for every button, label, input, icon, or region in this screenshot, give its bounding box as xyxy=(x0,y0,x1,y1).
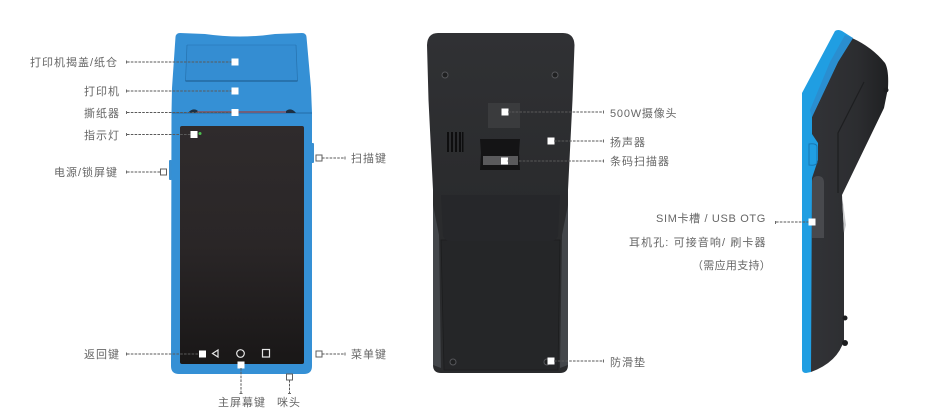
label: paper cutter xyxy=(84,106,238,120)
screws xyxy=(442,72,558,365)
label: printer: 打印机 xyxy=(84,84,120,98)
label: printer cover xyxy=(30,55,238,69)
back body xyxy=(427,33,574,373)
label: anti-slip pad xyxy=(548,355,646,369)
label: menu key xyxy=(316,347,387,361)
label: speaker xyxy=(548,135,646,149)
label: speaker: 扬声器 xyxy=(610,135,646,149)
back view of device xyxy=(427,33,574,373)
label: back key: 返回键 xyxy=(84,347,120,361)
label: indicator: 指示灯 xyxy=(84,128,120,142)
label: SIM slot and audio jack: SIM卡槽 / USB OTG xyxy=(656,212,766,225)
label: printer xyxy=(84,84,238,98)
speaker grille xyxy=(447,132,464,152)
home softkey xyxy=(237,350,244,357)
label: barcode scanner: 条码扫描器 xyxy=(610,154,670,168)
grip highlight xyxy=(842,195,846,233)
label: microphone xyxy=(277,374,301,409)
blue front edge xyxy=(802,30,853,373)
label: power key: 电源/锁屏键 xyxy=(54,165,118,179)
printer cover xyxy=(186,45,298,81)
menu softkey xyxy=(262,350,270,357)
label: SIM slot and audio jack xyxy=(629,212,816,272)
battery cover xyxy=(441,240,560,370)
scanner recess xyxy=(480,139,520,170)
label: SIM slot and audio jack: 耳机孔: 可接音响/ 刷卡器 xyxy=(629,235,767,249)
label: scan key: 扫描键 xyxy=(351,151,387,165)
body crease xyxy=(838,82,864,193)
label: barcode scanner xyxy=(501,154,670,168)
label: home key: 主屏幕键 xyxy=(218,395,266,409)
power key xyxy=(809,144,817,165)
side button left xyxy=(169,160,172,180)
label: scan key xyxy=(316,151,387,165)
printer cover stripe xyxy=(810,35,853,117)
scanner window xyxy=(483,156,518,165)
label: camera: 500W摄像头 xyxy=(610,106,677,120)
screen xyxy=(180,126,304,364)
SIM slot cover xyxy=(812,176,824,238)
label: microphone: 咪头 xyxy=(277,396,301,409)
side shading xyxy=(433,205,568,368)
indicator LED xyxy=(198,132,202,135)
upper cover panel xyxy=(441,195,560,241)
label: home key xyxy=(218,362,266,409)
label: printer cover: 打印机揭盖/纸仓 xyxy=(30,55,118,69)
label: SIM slot and audio jack: （需应用支持） xyxy=(692,258,771,272)
rear nubs xyxy=(842,88,888,346)
back softkey xyxy=(212,350,218,357)
label: power key xyxy=(54,165,166,179)
side view of device xyxy=(802,30,888,373)
side button right xyxy=(311,143,314,163)
label: anti-slip pad: 防滑垫 xyxy=(610,355,646,369)
label: camera xyxy=(502,106,677,120)
label: menu key: 菜单键 xyxy=(351,347,387,361)
label: indicator xyxy=(84,128,198,142)
front view of device xyxy=(169,33,314,374)
label: paper cutter: 撕纸器 xyxy=(84,106,120,120)
paper cutter xyxy=(172,109,312,113)
camera window xyxy=(488,103,520,128)
front body xyxy=(171,33,312,374)
rear dark shell xyxy=(810,38,888,372)
label: back key xyxy=(84,347,206,361)
